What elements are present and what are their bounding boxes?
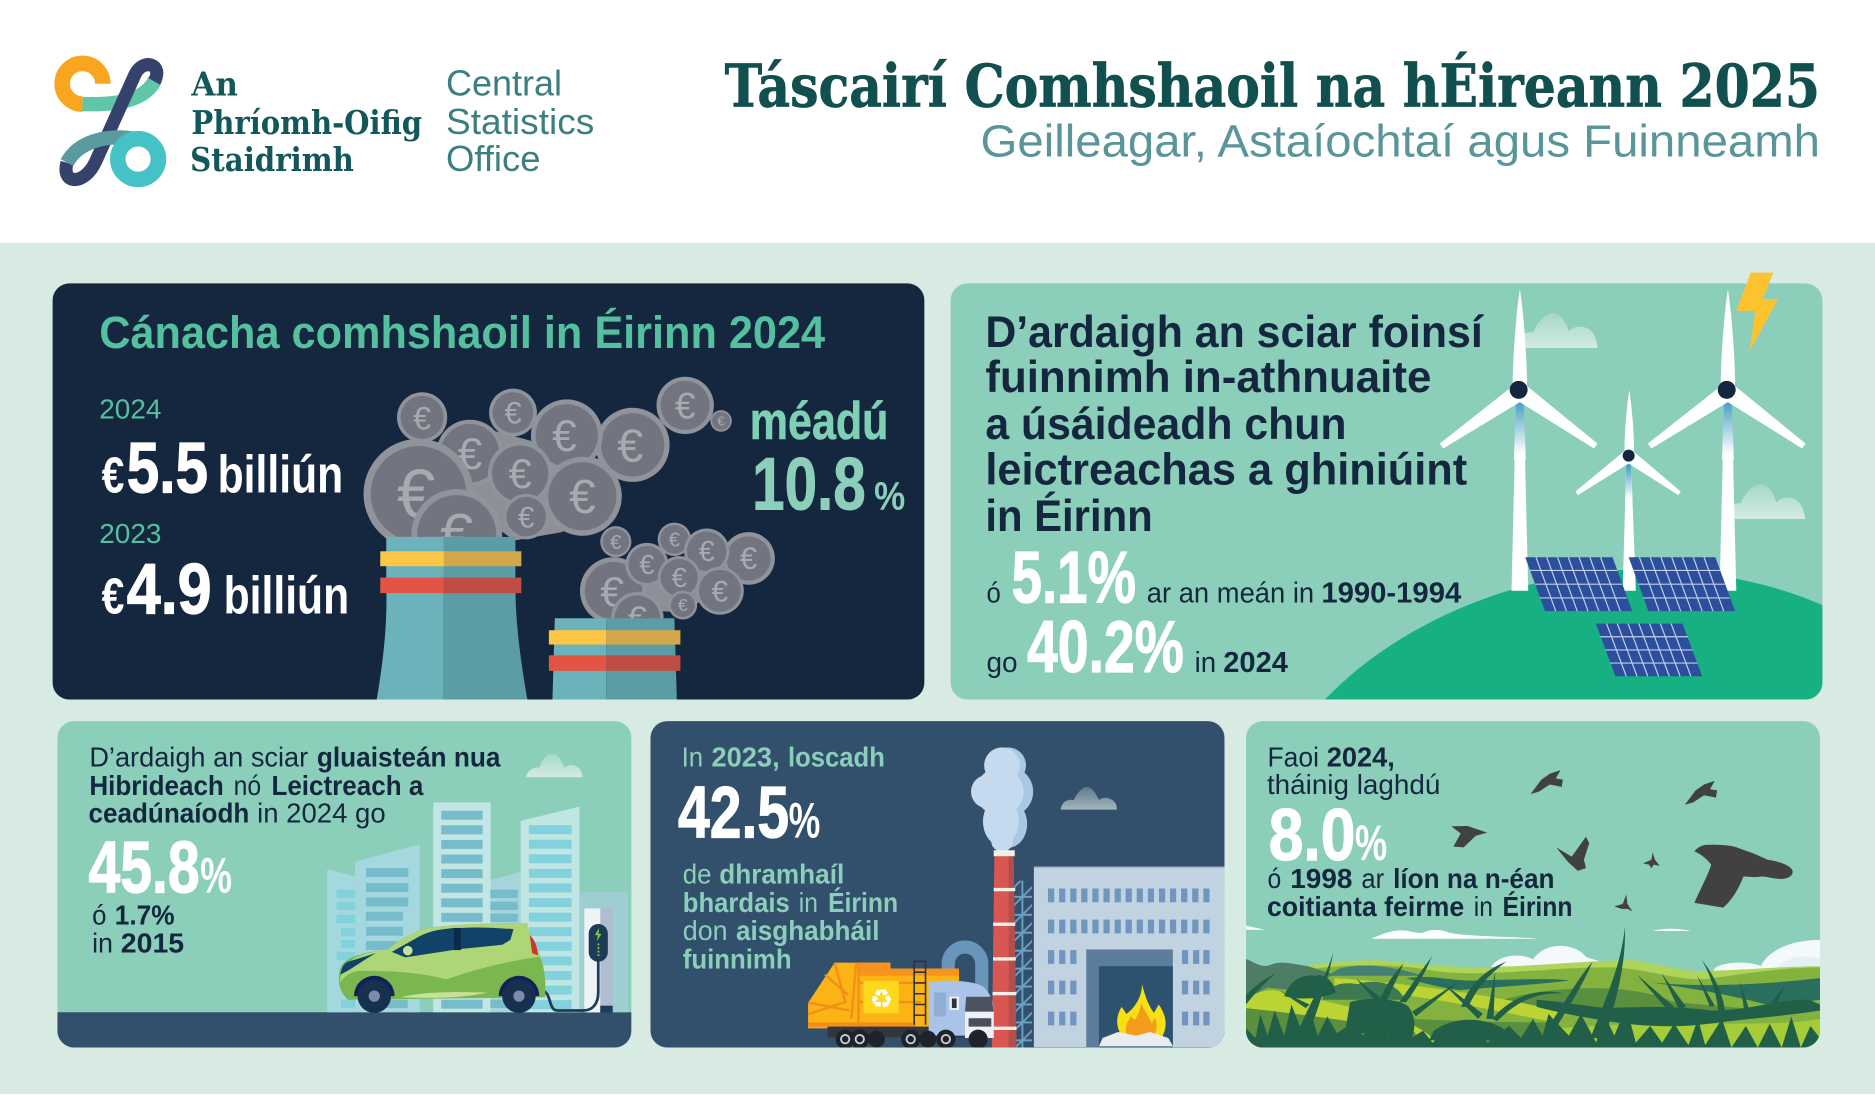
increase callout [750, 392, 905, 525]
description text: Éirinn [828, 887, 898, 918]
stat: to 40.2% [987, 607, 1288, 688]
icon: birds [1451, 770, 1793, 911]
2023 value: billiún [224, 566, 349, 625]
description text: ar [1361, 863, 1384, 894]
stat: to 40.2%: in [1195, 647, 1216, 679]
intro text: in 2024 go [257, 798, 386, 829]
intro text: gluaisteán nua [317, 742, 501, 773]
text: from 1.7% in 2015: in [92, 927, 113, 958]
icon: building [1034, 867, 1225, 1048]
2024 value: € [102, 446, 124, 504]
description text: líon na n-éan [1393, 863, 1555, 894]
icon: euro coin smoke, large chimney [364, 377, 732, 580]
icon: euro coin smoke, large chimney: € [509, 450, 532, 497]
icon: pipe [948, 947, 982, 995]
text: from 1.7% in 2015 [92, 899, 184, 958]
icon: euro coin smoke, small chimney [580, 523, 775, 645]
icon: left wind turbine [1440, 289, 1598, 591]
heading: fuinnimh in-athnuaite [985, 353, 1431, 402]
description text: in [1474, 891, 1493, 922]
2023 value [99, 518, 349, 629]
stat: 42.5%: 42.5 [678, 773, 789, 854]
text: 2024 intro: tháinig laghdú [1267, 769, 1440, 800]
2024 value: 2024 [99, 394, 161, 425]
text: from 1.7% in 2015: ó [92, 899, 106, 930]
stat: 8.0%: 8.0 [1269, 795, 1355, 876]
icon: euro coin smoke, large chimney: € [675, 385, 696, 427]
panel: electric cars [57, 721, 631, 1048]
description text [1267, 863, 1572, 922]
intro text: Hibrideach [89, 770, 224, 801]
icon: euro coin smoke, small chimney: € [628, 600, 647, 638]
panel: farmland birds [1245, 721, 1875, 1048]
icon: euro coin smoke, small chimney: € [699, 536, 715, 568]
icon: euro coin smoke, large chimney: € [717, 414, 725, 429]
icon: charging point [544, 908, 613, 1012]
description text: Éirinn [1503, 891, 1572, 922]
icon: middle wind turbine [1575, 390, 1681, 591]
icon: recycling truck [808, 961, 994, 1049]
text: 2024 intro: Faoi [1268, 742, 1319, 773]
icon: euro coin smoke, small chimney: € [740, 541, 757, 576]
icon: euro coin smoke, large chimney: € [617, 420, 643, 472]
stat: to 40.2%: go [987, 647, 1018, 679]
description text: coitianta feirme [1267, 891, 1464, 922]
icon: cloud [1061, 787, 1117, 810]
icon: lightning bolt [1736, 273, 1778, 352]
panel: renewable electricity [951, 273, 1825, 700]
intro text: 2023, [711, 742, 780, 773]
icon: rolling hills [1246, 959, 1820, 1048]
2024 value: 5.5 [127, 429, 208, 509]
stat: from 5.1%: ó [987, 578, 1001, 610]
icon: euro coin smoke, small chimney: € [669, 529, 681, 551]
icon: green car [339, 923, 545, 1013]
icon: euro coin smoke, large chimney: € [569, 471, 596, 524]
2023 value: € [102, 566, 124, 624]
text: from 1.7% in 2015: 2015 [121, 927, 184, 958]
icon: euro coin smoke, small chimney: € [610, 532, 622, 554]
description text: don [683, 915, 728, 946]
text: from 1.7% in 2015: 1.7% [115, 899, 175, 930]
icon: euro coin smoke, large chimney: € [397, 455, 435, 533]
description text: aisghabháil [736, 915, 880, 946]
stat: 42.5%: % [789, 793, 820, 849]
description text: fuinnimh [683, 944, 792, 975]
icon: solar panels [1525, 557, 1735, 676]
icon: fire [1099, 984, 1173, 1046]
heading: leictreachas a ghiniúint [985, 445, 1467, 494]
logo text: English name [446, 64, 594, 179]
icon: euro coin smoke, small chimney: € [600, 568, 624, 616]
description text: dhramhaíl [719, 859, 844, 890]
stat: to 40.2%: 40.2% [1027, 607, 1184, 688]
description text: de [683, 859, 711, 890]
description text: ó [1268, 863, 1281, 894]
2024 value [99, 394, 343, 509]
stat: to 40.2%: 2024 [1223, 647, 1288, 679]
2023 value: 4.9 [127, 549, 212, 629]
page background [0, 243, 1875, 1094]
panel: environmental taxes [53, 283, 924, 700]
icon: euro coin smoke, large chimney: € [504, 395, 522, 430]
icon: euro coin smoke, large chimney: € [440, 501, 473, 568]
description text: 1998 [1290, 863, 1352, 894]
2023 value: 2023 [99, 518, 161, 549]
icon: euro coin smoke, large chimney: € [518, 501, 535, 534]
intro text [88, 742, 501, 829]
icon: large chimney [377, 537, 527, 700]
icon: scaffolding [1014, 881, 1228, 1048]
heading: Cánacha comhshaoil in Éirinn 2024 [99, 307, 826, 358]
stat: from 5.1%: ar an meán in [1147, 578, 1314, 610]
icon: recycling truck: ♻ [870, 985, 893, 1015]
logo text: Irish name: An [190, 66, 238, 104]
2024 value: billiún [218, 446, 343, 505]
text: 2024 intro [1267, 742, 1440, 800]
icon: euro coin smoke, large chimney: € [458, 430, 482, 479]
icon: city buildings [327, 802, 628, 1012]
heading [985, 308, 1484, 541]
increase callout: méadú [750, 392, 888, 451]
icon: clouds [1246, 926, 1820, 971]
logo text: English name: Central [446, 64, 562, 104]
increase callout: 10.8 [752, 442, 866, 525]
stat: 45.8%: 45.8 [88, 828, 200, 909]
icon: euro coin smoke, small chimney: € [639, 549, 655, 580]
increase callout: % [874, 474, 905, 518]
stat: from 5.1% [987, 538, 1461, 619]
heading: in Éirinn [985, 491, 1153, 541]
description text [683, 859, 898, 975]
description text: in [799, 887, 818, 918]
text: 2024 intro: 2024, [1327, 742, 1395, 773]
icon: right wind turbine [1648, 289, 1806, 591]
icon: hedges and grass silhouette [1246, 927, 1820, 1048]
logo text: Irish name: Staidrimh [190, 141, 354, 179]
stat: 45.8%: % [200, 848, 232, 904]
logo: CSO mark [62, 63, 158, 180]
icon: euro coin smoke, small chimney: € [678, 595, 688, 615]
heading: D’ardaigh an sciar foinsí [985, 308, 1484, 357]
intro text: ceadúnaíodh [88, 798, 249, 829]
heading: a úsáideadh chun [985, 400, 1346, 449]
icon: euro coin smoke, small chimney: € [672, 562, 687, 593]
icon: euro coin smoke, small chimney: € [712, 576, 729, 609]
intro text [682, 742, 885, 773]
intro text: nó [234, 770, 261, 801]
intro text: loscadh [788, 742, 885, 773]
icon: smoke plume [971, 747, 1033, 851]
stat: from 5.1%: 1990-1994 [1321, 578, 1461, 610]
illustration: landscape [1245, 926, 1875, 1048]
icon: euro coin smoke, large chimney: € [413, 400, 431, 436]
icon: small chimney [549, 618, 680, 700]
illustration: waste-to-energy plant [808, 747, 1228, 1049]
icon: clouds [1514, 313, 1805, 519]
intro text: Leictreach a [271, 770, 424, 801]
icon: chimney [992, 850, 1016, 1048]
icon: euro coin smoke, large chimney: € [552, 412, 577, 461]
panel: waste incineration [651, 721, 1228, 1049]
intro text: In [682, 742, 703, 773]
icon: cloud [526, 753, 582, 777]
logo text: English name: Office [446, 139, 540, 179]
road [57, 1012, 631, 1048]
stat: from 5.1%: 5.1% [1012, 538, 1136, 619]
description text: bhardais [683, 887, 790, 918]
logo text: Irish name [190, 66, 422, 179]
logo text: Irish name: Phríomh-Oifig [191, 104, 422, 142]
intro text: D’ardaigh an sciar [89, 742, 308, 773]
stat: 8.0%: % [1355, 815, 1387, 871]
icon: green hill [1325, 569, 1825, 700]
logo text: English name: Statistics [446, 102, 594, 142]
subtitle: Geilleagar, Astaíochtaí agus Fuinneamh [981, 116, 1820, 167]
